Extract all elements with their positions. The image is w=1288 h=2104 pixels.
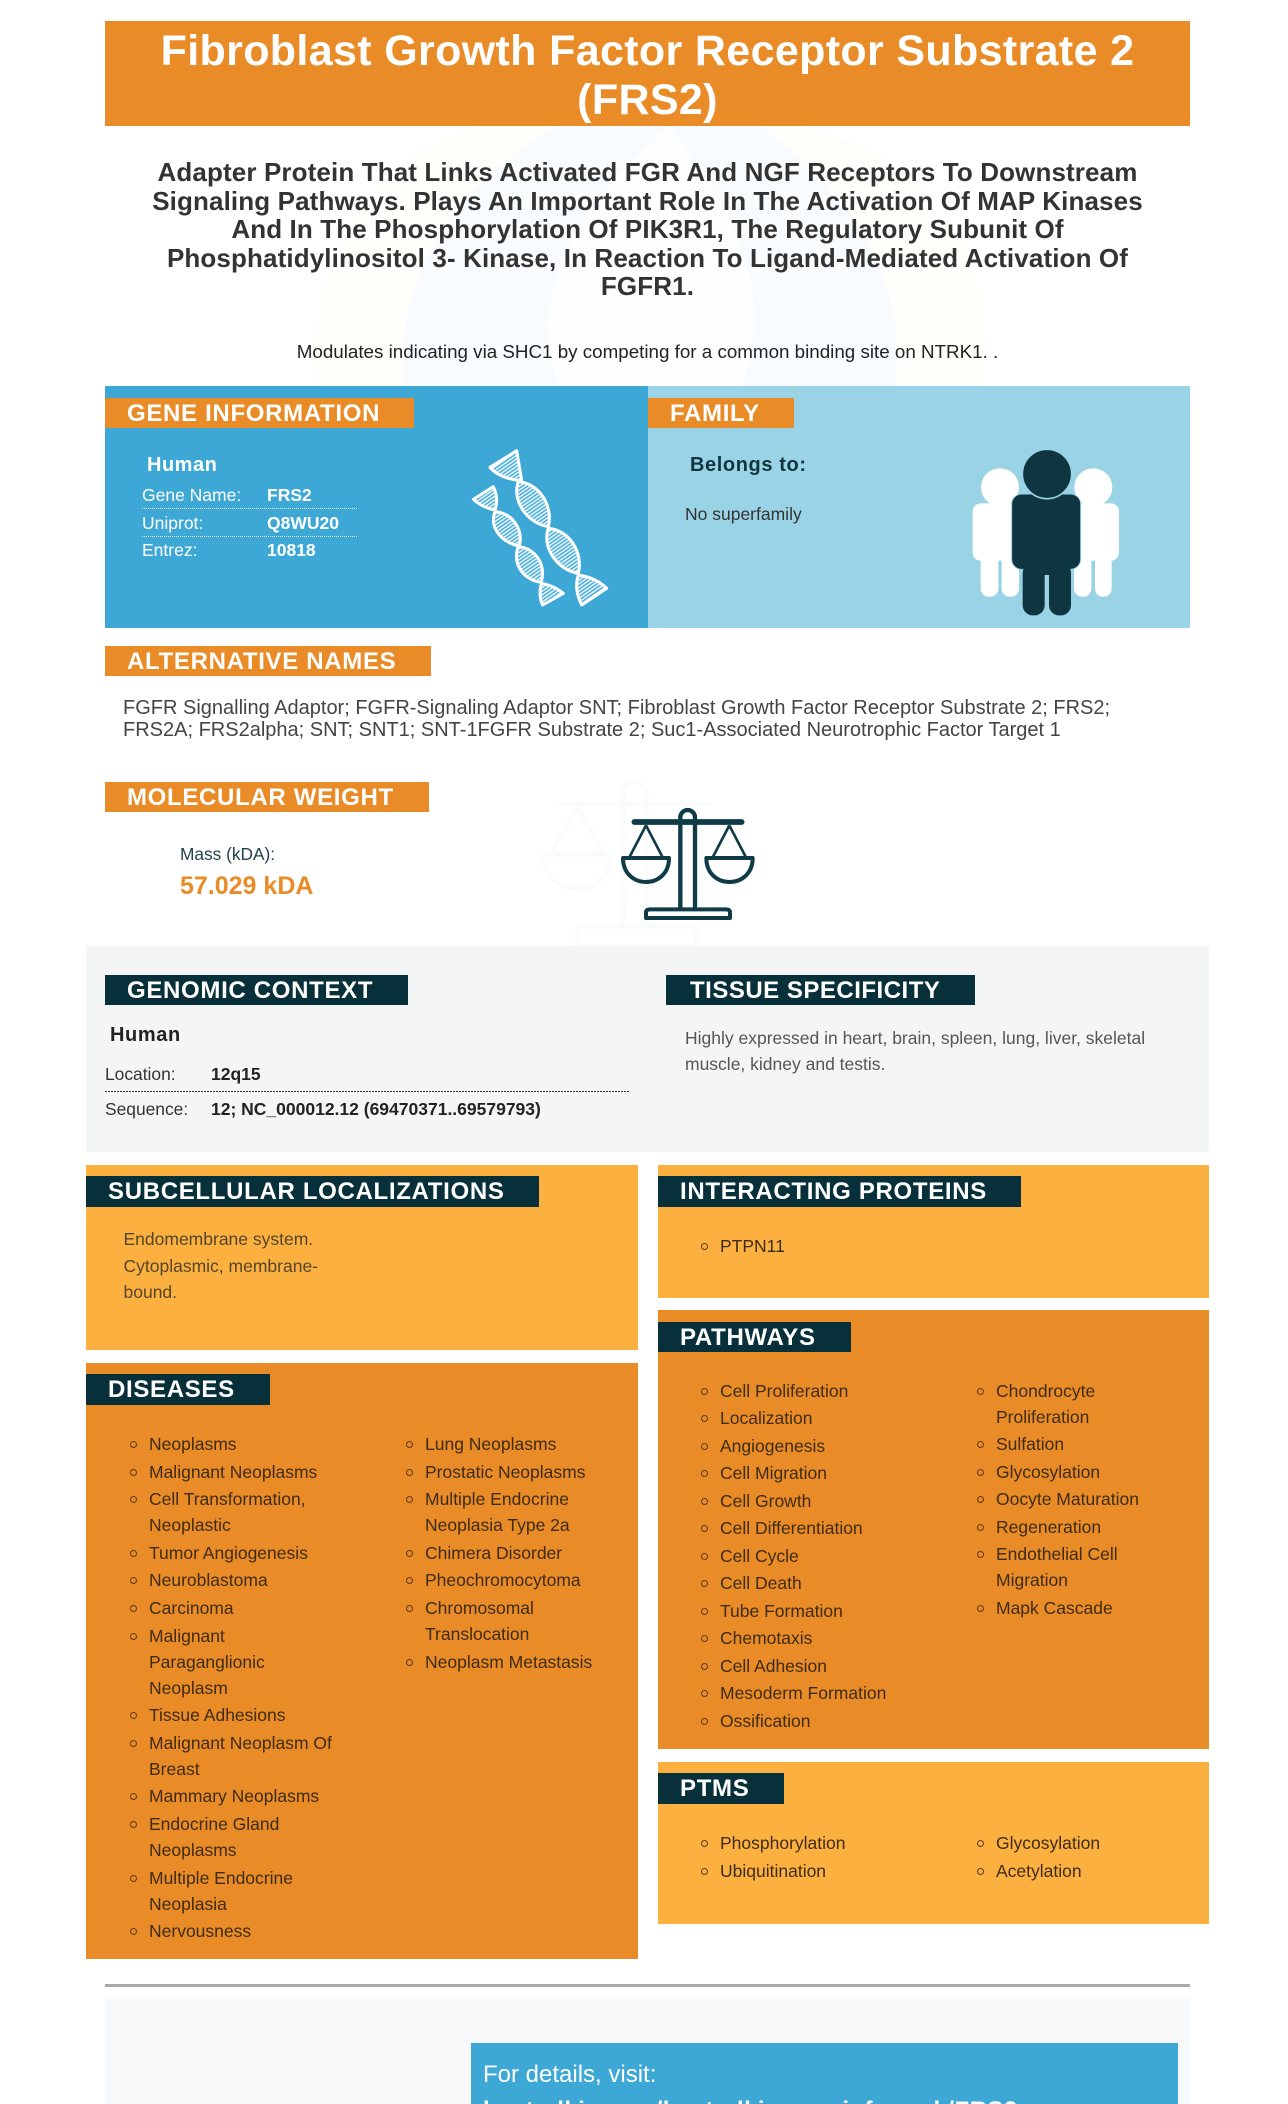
gene name row bbox=[142, 484, 357, 509]
subcellular text: Endomembrane system. bbox=[124, 1229, 313, 1249]
ptms list column 1 bbox=[701, 1833, 846, 1880]
callout: details link bbox=[471, 2043, 1178, 2104]
ptms list column 2 bbox=[977, 1833, 1100, 1880]
subcellular text: bound. bbox=[124, 1282, 177, 1302]
sequence row: Sequence: bbox=[105, 1099, 188, 1119]
subtitle description: And In The Phosphorylation Of PIK3R1, The Regulatory Subunit Of bbox=[231, 214, 1064, 244]
ptms list column 1: Ubiquitination bbox=[720, 1860, 826, 1880]
diseases list column 1: Endocrine Gland bbox=[149, 1814, 279, 1834]
location row: Location: bbox=[105, 1064, 176, 1084]
belongs to label: Belongs to: bbox=[690, 454, 807, 476]
heading: molecular weight: MOLECULAR WEIGHT bbox=[127, 784, 394, 811]
pathways list column 2: Mapk Cascade bbox=[996, 1598, 1113, 1618]
heading: genomic context: GENOMIC CONTEXT bbox=[127, 977, 373, 1004]
pathways list column 1: Ossification bbox=[720, 1710, 810, 1730]
pathways list column 1: Cell Proliferation bbox=[720, 1380, 848, 1400]
diseases list column 1: Multiple Endocrine bbox=[149, 1868, 293, 1888]
heading: pathways: PATHWAYS bbox=[680, 1324, 816, 1351]
heading: diseases bbox=[86, 1374, 270, 1405]
panel: subcellular localizations bbox=[86, 1165, 638, 1350]
title: Fibroblast Growth Factor Receptor Substrate 2 bbox=[161, 27, 1134, 75]
pathways list column 2: Migration bbox=[996, 1570, 1068, 1590]
mass label: Mass (kDA): bbox=[180, 844, 275, 864]
pathways list column 1: Cell Cycle bbox=[720, 1546, 799, 1566]
pathways list column 2: Glycosylation bbox=[996, 1462, 1100, 1482]
diseases list column 2: Pheochromocytoma bbox=[425, 1570, 581, 1590]
heading: diseases: DISEASES bbox=[108, 1376, 235, 1403]
icon: scale bbox=[621, 808, 755, 920]
panel: genomic context and tissue bbox=[86, 946, 1209, 1152]
pathways list column 1: Cell Death bbox=[720, 1573, 802, 1593]
entrez row: 10818 bbox=[267, 540, 316, 560]
pathways list column 2: Regeneration bbox=[996, 1516, 1101, 1536]
uniprot row bbox=[142, 512, 357, 537]
diseases list column 2: Chromosomal bbox=[425, 1598, 534, 1618]
heading: subcellular localizations: SUBCELLULAR LOCALIZATIONS bbox=[108, 1178, 505, 1205]
location row bbox=[105, 1064, 261, 1084]
alternative names text: FRS2A; FRS2alpha; SNT; SNT1; SNT-1FGFR Substrate 2; Suc1-Associated Neurotrophic Factor Target 1 bbox=[123, 719, 1061, 741]
pathways list column 1: Tube Formation bbox=[720, 1600, 843, 1620]
heading: family bbox=[648, 398, 794, 428]
diseases list column 2: Translocation bbox=[425, 1624, 529, 1644]
diseases list column 1: Malignant bbox=[149, 1626, 225, 1646]
pathways list column 1: Angiogenesis bbox=[720, 1436, 825, 1456]
diseases list column 2 bbox=[406, 1434, 592, 1672]
diseases list column 2: Neoplasm Metastasis bbox=[425, 1652, 592, 1672]
icon: ghost scale bbox=[520, 780, 780, 946]
sequence row bbox=[105, 1099, 541, 1119]
diseases list column 1: Neoplasia bbox=[149, 1894, 227, 1914]
diseases list column 1: Neoplasms bbox=[149, 1840, 237, 1860]
diseases list column 1: Neoplasms bbox=[149, 1434, 237, 1454]
interacting list: PTPN11 bbox=[720, 1236, 785, 1256]
pathways list column 1: Chemotaxis bbox=[720, 1628, 812, 1648]
pathways list column 1: Cell Adhesion bbox=[720, 1656, 827, 1676]
pathways list column 2: Sulfation bbox=[996, 1434, 1064, 1454]
pathways list column 2: Chondrocyte bbox=[996, 1380, 1095, 1400]
diseases list column 1 bbox=[130, 1434, 332, 1941]
diseases list column 1: Tumor Angiogenesis bbox=[149, 1543, 308, 1563]
uniprot row: Uniprot: bbox=[142, 513, 203, 533]
diseases list column 1: Mammary Neoplasms bbox=[149, 1786, 319, 1806]
function text: Modulates indicating via SHC1 by competing for a common binding site on NTRK1. . bbox=[297, 341, 998, 362]
gene species: Human bbox=[147, 454, 217, 476]
diseases list column 1: Neoplasm bbox=[149, 1678, 228, 1698]
diseases list column 2: Chimera Disorder bbox=[425, 1543, 562, 1563]
pathways list column 2: Oocyte Maturation bbox=[996, 1489, 1139, 1509]
subtitle description: Adapter Protein That Links Activated FGR And NGF Receptors To Downstream bbox=[158, 157, 1137, 187]
uniprot row: Q8WU20 bbox=[267, 513, 339, 533]
heading: family: FAMILY bbox=[670, 400, 760, 427]
pathways list column 1: Cell Growth bbox=[720, 1490, 811, 1510]
gene name row: Gene Name: bbox=[142, 485, 241, 505]
diseases list column 1: Malignant Neoplasms bbox=[149, 1462, 317, 1482]
title bbox=[105, 21, 1190, 126]
subtitle description: Signaling Pathways. Plays An Important Role In The Activation Of MAP Kinases bbox=[152, 186, 1143, 216]
subtitle description: FGFR1. bbox=[601, 271, 694, 301]
entrez row: Entrez: bbox=[142, 540, 197, 560]
pathways list column 2: Endothelial Cell bbox=[996, 1544, 1118, 1564]
panel: diseases bbox=[86, 1363, 638, 1959]
heading: alternative names: ALTERNATIVE NAMES bbox=[127, 648, 396, 675]
subcellular text bbox=[124, 1229, 318, 1302]
heading: ptms bbox=[658, 1773, 784, 1804]
ptms list column 2: Glycosylation bbox=[996, 1833, 1100, 1853]
subtitle description: Phosphatidylinositol 3- Kinase, In Reaction To Ligand-Mediated Activation Of bbox=[167, 243, 1128, 273]
panel: family bbox=[648, 386, 1190, 628]
diseases list column 2: Neoplasia Type 2a bbox=[425, 1515, 570, 1535]
diseases list column 2: Lung Neoplasms bbox=[425, 1434, 556, 1454]
heading: gene information: GENE INFORMATION bbox=[127, 400, 380, 427]
ptms list column 1: Phosphorylation bbox=[720, 1833, 846, 1853]
diseases list column 1: Cell Transformation, bbox=[149, 1489, 306, 1509]
genomic species: Human bbox=[110, 1024, 181, 1046]
panel: footer bbox=[105, 1999, 1190, 2104]
title: (FRS2) bbox=[577, 76, 718, 124]
tissue text bbox=[685, 1028, 1145, 1074]
diseases list column 1: Paraganglionic bbox=[149, 1652, 265, 1672]
pathways list column 1: Cell Differentiation bbox=[720, 1518, 863, 1538]
tissue text: muscle, kidney and testis. bbox=[685, 1054, 885, 1074]
ptms list column 2: Acetylation bbox=[996, 1860, 1082, 1880]
text: 12; NC_000012.12 (69470371..69579793) bbox=[211, 1099, 541, 1119]
heading: pathways bbox=[658, 1322, 851, 1352]
pathways list column 2: Proliferation bbox=[996, 1406, 1089, 1426]
diseases list column 1: Breast bbox=[149, 1759, 200, 1779]
diseases list column 1: Malignant Neoplasm Of bbox=[149, 1733, 332, 1753]
text: 12q15 bbox=[211, 1064, 261, 1084]
diseases list column 1: Nervousness bbox=[149, 1921, 251, 1941]
heading: tissue specificity: TISSUE SPECIFICITY bbox=[690, 977, 940, 1004]
family value: No superfamily bbox=[685, 504, 802, 524]
icon: dna bbox=[472, 449, 608, 607]
diseases list column 1: Neoplastic bbox=[149, 1515, 231, 1535]
alternative names text bbox=[123, 697, 1110, 741]
pathways list column 2 bbox=[977, 1380, 1139, 1618]
panel: gene information bbox=[105, 386, 648, 628]
panel: ptms bbox=[658, 1762, 1209, 1924]
divider bbox=[105, 1984, 1190, 1987]
diseases list column 1: Tissue Adhesions bbox=[149, 1705, 286, 1725]
heading: interacting proteins: INTERACTING PROTEINS bbox=[680, 1178, 987, 1205]
pathways list column 1 bbox=[701, 1380, 886, 1730]
panel: interacting proteins bbox=[658, 1165, 1209, 1298]
gene name row: FRS2 bbox=[267, 485, 312, 505]
pathways list column 1: Localization bbox=[720, 1408, 812, 1428]
entrez row bbox=[142, 540, 316, 560]
callout: details link: For details, visit: bbox=[483, 2061, 656, 2088]
mass value: 57.029 kDA bbox=[180, 872, 313, 900]
alternative names text: FGFR Signalling Adaptor; FGFR-Signaling Adaptor SNT; Fibroblast Growth Factor Receptor Substrate 2; FRS2; bbox=[123, 697, 1110, 719]
pathways list column 1: Mesoderm Formation bbox=[720, 1683, 886, 1703]
diseases list column 2: Prostatic Neoplasms bbox=[425, 1462, 585, 1482]
diseases list column 1: Neuroblastoma bbox=[149, 1570, 268, 1590]
subtitle description bbox=[152, 157, 1143, 301]
diseases list column 2: Multiple Endocrine bbox=[425, 1489, 569, 1509]
diseases list column 1: Carcinoma bbox=[149, 1598, 234, 1618]
subcellular text: Cytoplasmic, membrane- bbox=[124, 1256, 318, 1276]
pathways list column 1: Cell Migration bbox=[720, 1463, 827, 1483]
dotted rule bbox=[105, 1091, 629, 1092]
heading: ptms: PTMS bbox=[680, 1775, 749, 1802]
icon: people bbox=[972, 450, 1119, 616]
panel: pathways bbox=[658, 1310, 1209, 1749]
tissue text: Highly expressed in heart, brain, spleen, lung, liver, skeletal bbox=[685, 1028, 1145, 1048]
